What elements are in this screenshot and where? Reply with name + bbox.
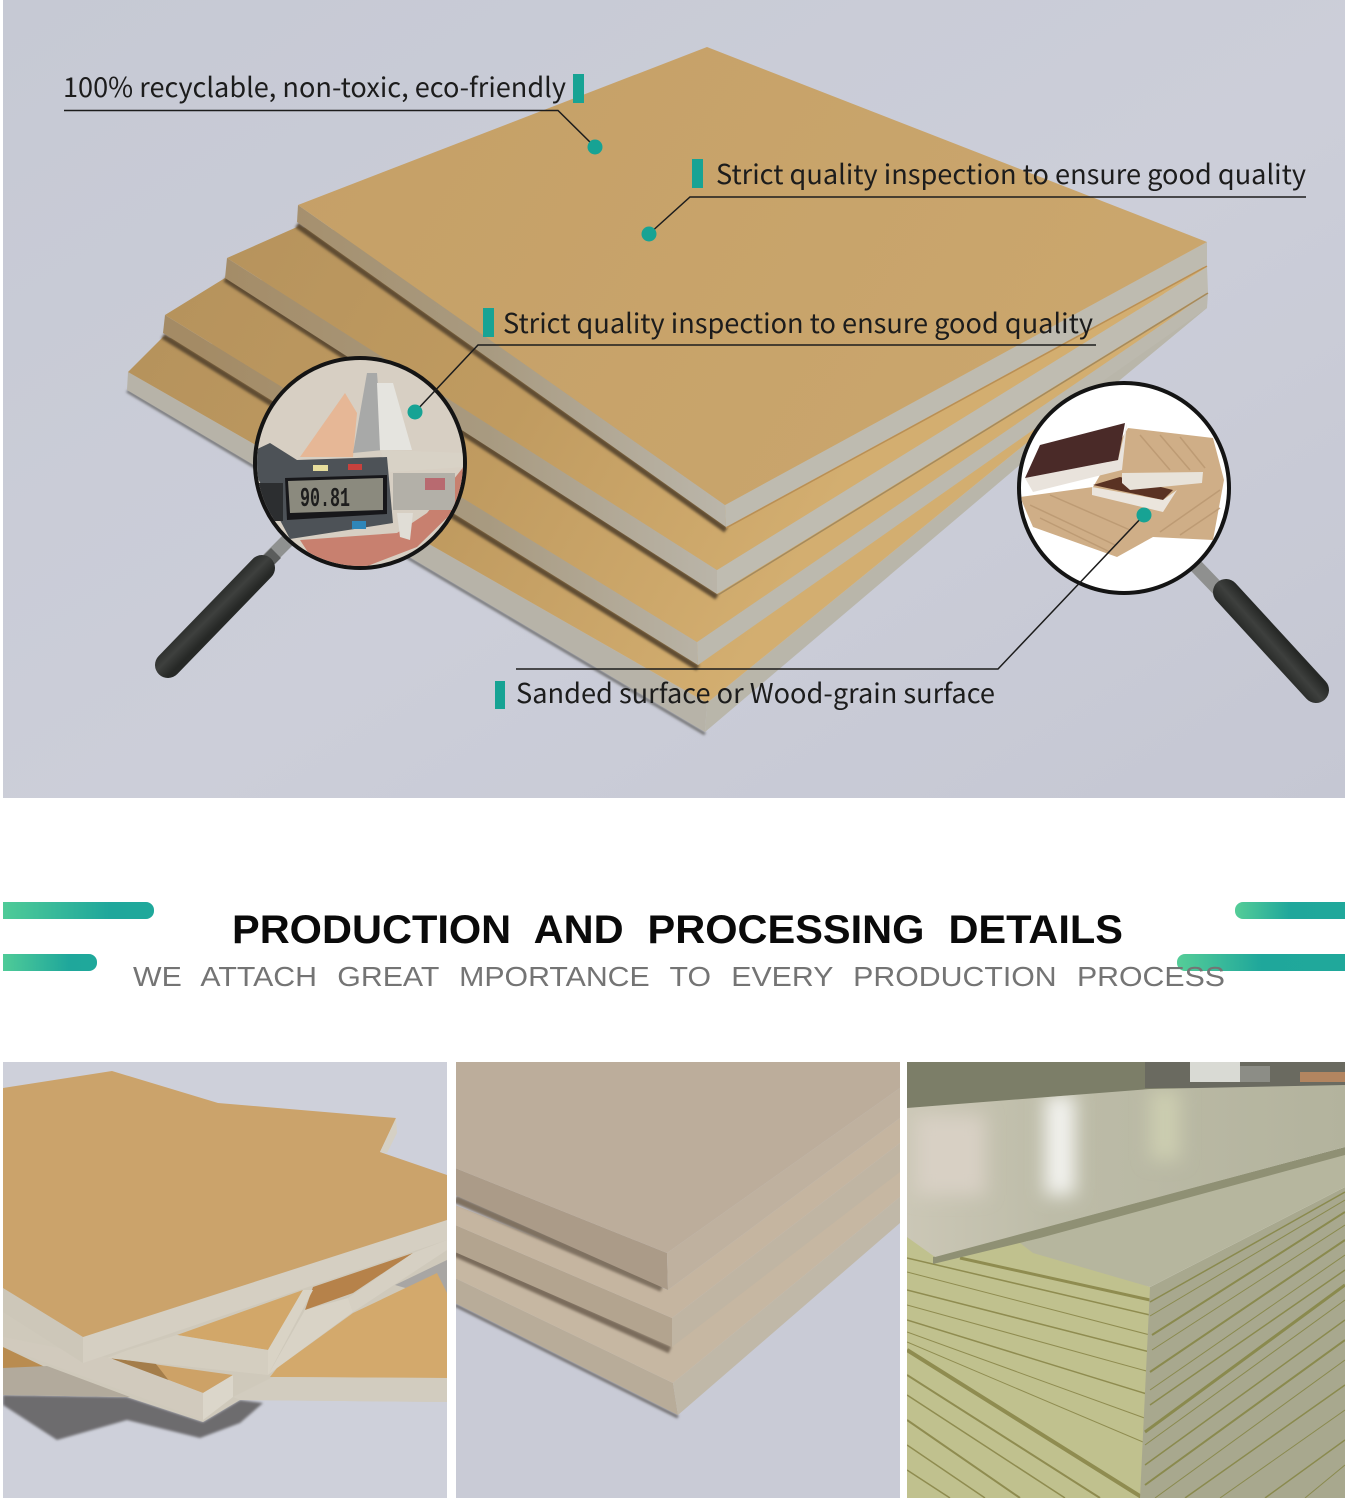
callout: quality inspection lower: Strict quality inspection to ensure good quality	[503, 302, 1093, 341]
upper shadow	[455, 1199, 662, 1288]
callout: recyclable	[63, 66, 602, 154]
magnifier left: handle	[168, 538, 290, 665]
top board	[455, 1062, 900, 1290]
callout: quality inspection upper: Strict quality inspection to ensure good quality	[716, 153, 1306, 192]
callout: quality inspection upper	[642, 153, 1306, 242]
lower shadow	[455, 1253, 670, 1350]
decorative bars left	[3, 902, 154, 971]
callout: quality inspection lower	[408, 302, 1096, 420]
callout: surface finish	[495, 508, 1152, 711]
callout: surface finish: Sanded surface or Wood-grain surface	[516, 672, 995, 711]
upper sheet with reflections	[907, 1085, 1345, 1260]
middle board	[455, 1118, 900, 1347]
hero background	[3, 0, 1345, 798]
magnifier right: board samples close-up	[1019, 383, 1229, 593]
right stack face	[1140, 1187, 1345, 1498]
callout: recyclable: 100% recyclable, non-toxic, eco-friendly	[63, 66, 566, 105]
lowest board	[455, 1165, 900, 1415]
lower boards	[3, 1220, 447, 1422]
factory background	[907, 1062, 1345, 1112]
photo: stack of olive sheets in factory	[907, 1062, 1345, 1498]
lower sheet	[1020, 1153, 1345, 1287]
upper sheet edge	[933, 1147, 1345, 1264]
ground shadow	[455, 1305, 678, 1417]
top board	[3, 1071, 447, 1363]
left stack face	[907, 1230, 1150, 1498]
stack of boards	[127, 47, 1208, 734]
subheading: WE ATTACH GREAT MPORTANCE TO EVERY PRODUCTION PROCESS	[133, 961, 1225, 992]
heading: PRODUCTION AND PROCESSING DETAILS	[232, 908, 1123, 952]
magnifier right: handle	[1196, 566, 1316, 690]
panel: hero product photo	[3, 0, 1345, 798]
photo: beige boards stacked	[455, 1062, 900, 1498]
section header	[3, 902, 1345, 992]
shadow under stack	[3, 1395, 263, 1440]
magnifier left: caliper close-up	[255, 358, 465, 570]
photo: tan boards fanned	[3, 1062, 447, 1498]
magnifier left: caliper close-up: 90.81	[300, 485, 350, 515]
decorative bars right	[1177, 902, 1345, 971]
